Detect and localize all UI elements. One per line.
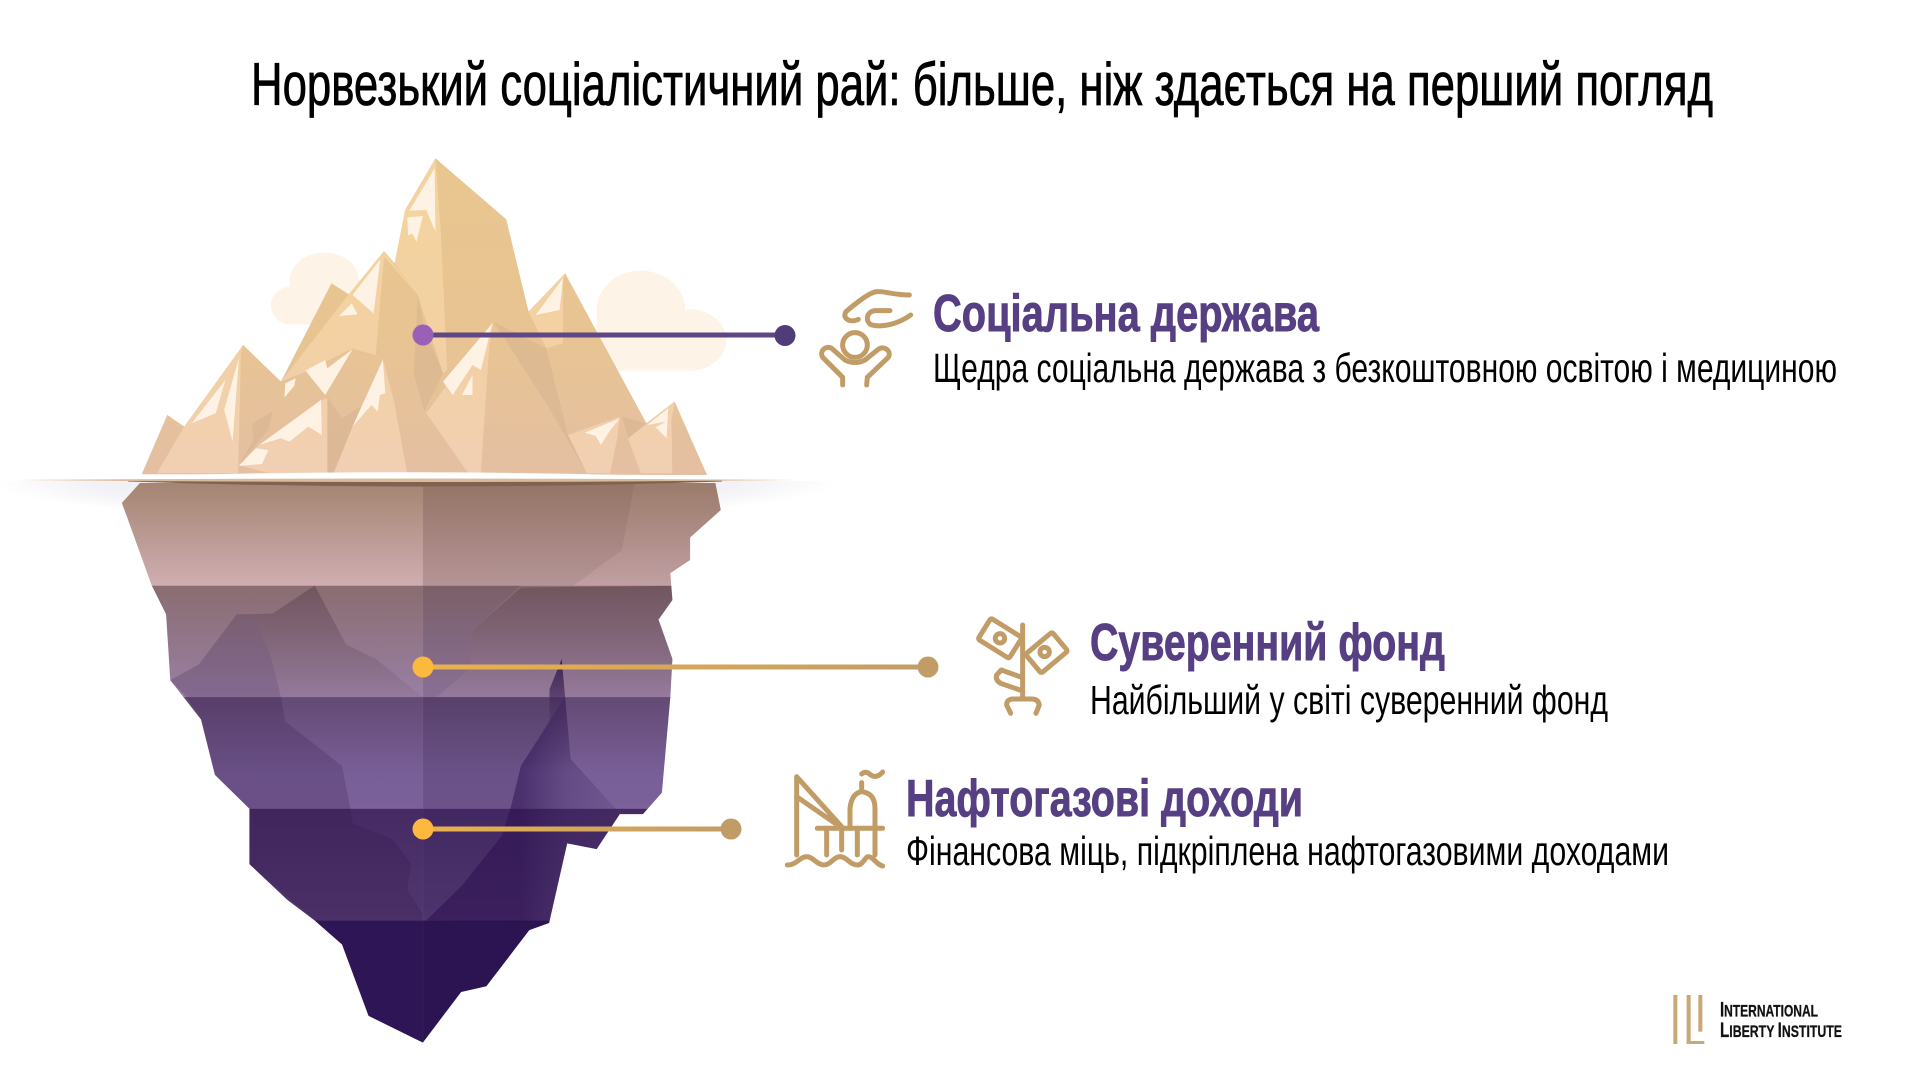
heading: social state: Соціальна держава — [933, 285, 1320, 343]
block: oil and gas revenue — [906, 770, 1669, 874]
text: oil and gas revenue description: Фінансова міць, підкріплена нафтогазовими доходами — [906, 828, 1669, 874]
clouds — [271, 253, 726, 371]
icon: oil rig — [787, 772, 883, 866]
heading: sovereign fund: Суверенний фонд — [1090, 614, 1445, 672]
logo text: INTERNATIONAL — [1720, 998, 1818, 1022]
icon: money plant — [978, 618, 1068, 713]
connector: oil and gas revenue — [412, 818, 742, 840]
logo text — [1720, 998, 1842, 1042]
connector: sovereign fund — [412, 656, 938, 678]
iceberg illustration — [0, 158, 840, 1057]
block: sovereign fund — [1090, 614, 1608, 723]
heading: oil and gas revenue: Нафтогазові доходи — [906, 770, 1303, 828]
mountain above water — [142, 158, 707, 475]
logo text: LIBERTY INSTITUTE — [1720, 1019, 1842, 1042]
logo mark — [1673, 995, 1704, 1044]
logo — [1673, 995, 1842, 1044]
connector: social state — [412, 324, 796, 346]
water line — [15, 472, 798, 485]
underwater shadow — [52, 481, 778, 502]
block: social state — [933, 285, 1837, 391]
iceberg below water — [122, 483, 721, 1042]
text: sovereign fund description: Найбільший у світі суверенний фонд — [1090, 677, 1608, 723]
icon: hand over child — [822, 292, 911, 385]
